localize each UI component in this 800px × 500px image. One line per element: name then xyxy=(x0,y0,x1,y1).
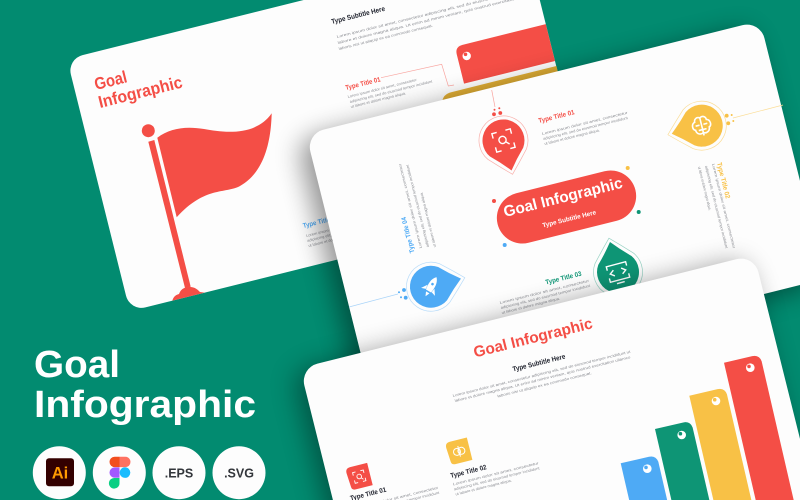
icon: Adobe Illustrator badge xyxy=(33,446,86,499)
shadow: center slide xyxy=(297,28,800,399)
panel: flag slide xyxy=(67,0,589,311)
text block: title 03: ut labore et dolore magna aliqua. xyxy=(501,297,560,315)
label: Type Title 01: Type Title 01 xyxy=(345,76,382,92)
connector line xyxy=(381,64,454,86)
bar: blue xyxy=(620,456,668,500)
text block: title 02: Lorem ipsum dolor sit amet, consectetur xyxy=(453,461,540,486)
dots: yellow pin xyxy=(725,114,734,125)
text block: title 02: ut labore et dolore magna aliqua. xyxy=(697,166,712,211)
text block: intro xyxy=(452,350,631,403)
text: Type Title 02: Type Title 02 xyxy=(715,162,731,200)
panel: bar chart slide xyxy=(300,255,800,500)
text block: intro: laboris nisi ut aliquip ex ea commodo consequat. xyxy=(338,24,433,51)
text block: title 02: ut labore et dolore magna aliqua. xyxy=(455,479,512,496)
heading: Goal Infographic: Infographic xyxy=(96,73,184,112)
icon: blue pin with rocket xyxy=(401,254,471,317)
text block: intro: laboris nisi ut aliquip ex ea commodo consequat. xyxy=(497,371,592,398)
text block: title 04: ut labore et dolore magna aliqua. xyxy=(419,191,437,248)
text block: title 02: Lorem ipsum dolor sit amet, consectetur xyxy=(711,163,736,250)
subtitle: Type Subtitle Here xyxy=(331,6,386,26)
dots: red pin xyxy=(492,107,502,116)
heading: Goal Infographic: Goal xyxy=(92,67,129,94)
icon: red tile xyxy=(345,463,373,491)
text block: title 04: Lorem ipsum dolor sit amet, consectetur xyxy=(306,217,376,238)
text block: title 01 xyxy=(542,111,629,146)
bar chart xyxy=(621,354,800,500)
text block: title 02 xyxy=(697,163,736,250)
icon: yellow tile xyxy=(445,438,472,465)
text block: title 03: Lorem ipsum dolor sit amet, consectetur xyxy=(499,279,591,305)
text block: title 01: Lorem ipsum dolor sit amet, consectetur xyxy=(347,78,418,99)
text block: title 03 xyxy=(499,279,591,315)
text block: title 04: adipiscing elit, sed do eiusmod tempor incididunt xyxy=(406,164,430,248)
text block: title 04: ut labore et dolore magna aliqua. xyxy=(308,230,364,248)
yellow bar xyxy=(440,66,581,192)
text block: title 01: ut labore et dolore magna aliqua. xyxy=(544,128,600,146)
center pill title: Type Subtitle Here xyxy=(542,209,597,229)
text block: intro: labore et dolore magna aliqua. Ut enim ad minim veniam, quis nostrud exercitation ullamco xyxy=(454,355,631,403)
subtitle: Type Subtitle Here xyxy=(512,354,566,373)
text block: title 04: Lorem ipsum dolor sit amet, consectetur xyxy=(398,162,423,249)
connector: blue pin xyxy=(349,294,398,307)
icon: Adobe Illustrator badge: Ai xyxy=(52,464,68,482)
badge: .EPS xyxy=(152,446,206,499)
bar: green xyxy=(655,422,710,500)
main title: Infographic xyxy=(34,384,256,426)
connector: yellow pin xyxy=(733,105,783,118)
icon: yellow pin with brain xyxy=(662,96,732,158)
text: Type Title 03: Type Title 03 xyxy=(545,271,583,286)
badge: .EPS: .EPS xyxy=(165,466,193,480)
text block: intro xyxy=(336,0,536,51)
text block: intro: labore et dolore magna aliqua. Ut enim ad minim veniam, quis nostrud exercitation ullamco xyxy=(337,0,536,45)
text block: title 01: ut labore et dolore magna aliqua. xyxy=(350,91,407,109)
icon: red pin with focus lens xyxy=(473,110,536,181)
shadow: bottom slide xyxy=(292,259,800,500)
text block: title 01 xyxy=(347,78,433,109)
label: Type Title 04: Type Title 04 xyxy=(302,214,339,230)
text block: title 02: adipiscing elit, sed do eiusmod tempor incididunt xyxy=(454,466,540,491)
text: Type Title 02: Type Title 02 xyxy=(450,464,488,480)
text block: title 02: adipiscing elit, sed do eiusmod tempor incididunt xyxy=(704,165,728,249)
bar: yellow xyxy=(689,388,752,500)
icon: Figma badge xyxy=(93,446,146,499)
center pill title xyxy=(491,165,642,249)
main title: Goal xyxy=(34,344,120,386)
bar: red xyxy=(724,354,800,500)
text block: title 04 xyxy=(398,162,437,249)
panel: center slide xyxy=(306,21,800,392)
text block: title 04 xyxy=(306,217,390,248)
main title xyxy=(34,344,256,426)
icon: flag xyxy=(142,113,272,304)
text block: title 04: adipiscing elit, sed do eiusmod tempor incididunt xyxy=(307,219,390,243)
text block: title 01: adipiscing elit, sed do eiusmod tempor incididunt xyxy=(543,116,628,141)
badge: .SVG: .SVG xyxy=(224,466,254,480)
badge: .SVG xyxy=(212,446,266,499)
text: Type Title 01: Type Title 01 xyxy=(538,109,576,125)
text block: title 01 xyxy=(352,486,440,500)
text block: title 01: Lorem ipsum dolor sit amet, consectetur xyxy=(542,111,629,136)
pill dots xyxy=(492,166,641,247)
text block: title 01: adipiscing elit, sed do eiusmod tempor incididunt xyxy=(349,80,433,104)
text block: title 03: adipiscing elit, sed do eiusmod tempor incididunt xyxy=(500,284,591,310)
heading: Goal Infographic xyxy=(472,315,595,361)
red bar xyxy=(456,24,555,84)
text: Type Title 04: Type Title 04 xyxy=(401,216,416,254)
center pill title: Goal Infographic xyxy=(502,175,625,221)
icon: green pin with code monitor xyxy=(585,232,648,302)
text block: intro: Lorem ipsum dolor sit amet, consectetur adipiscing elit, sed do eiusmod tempor incididunt ut xyxy=(452,350,631,398)
dots: blue pin xyxy=(398,288,408,300)
text block: title 02 xyxy=(453,461,540,496)
connector: red pin xyxy=(492,90,495,107)
